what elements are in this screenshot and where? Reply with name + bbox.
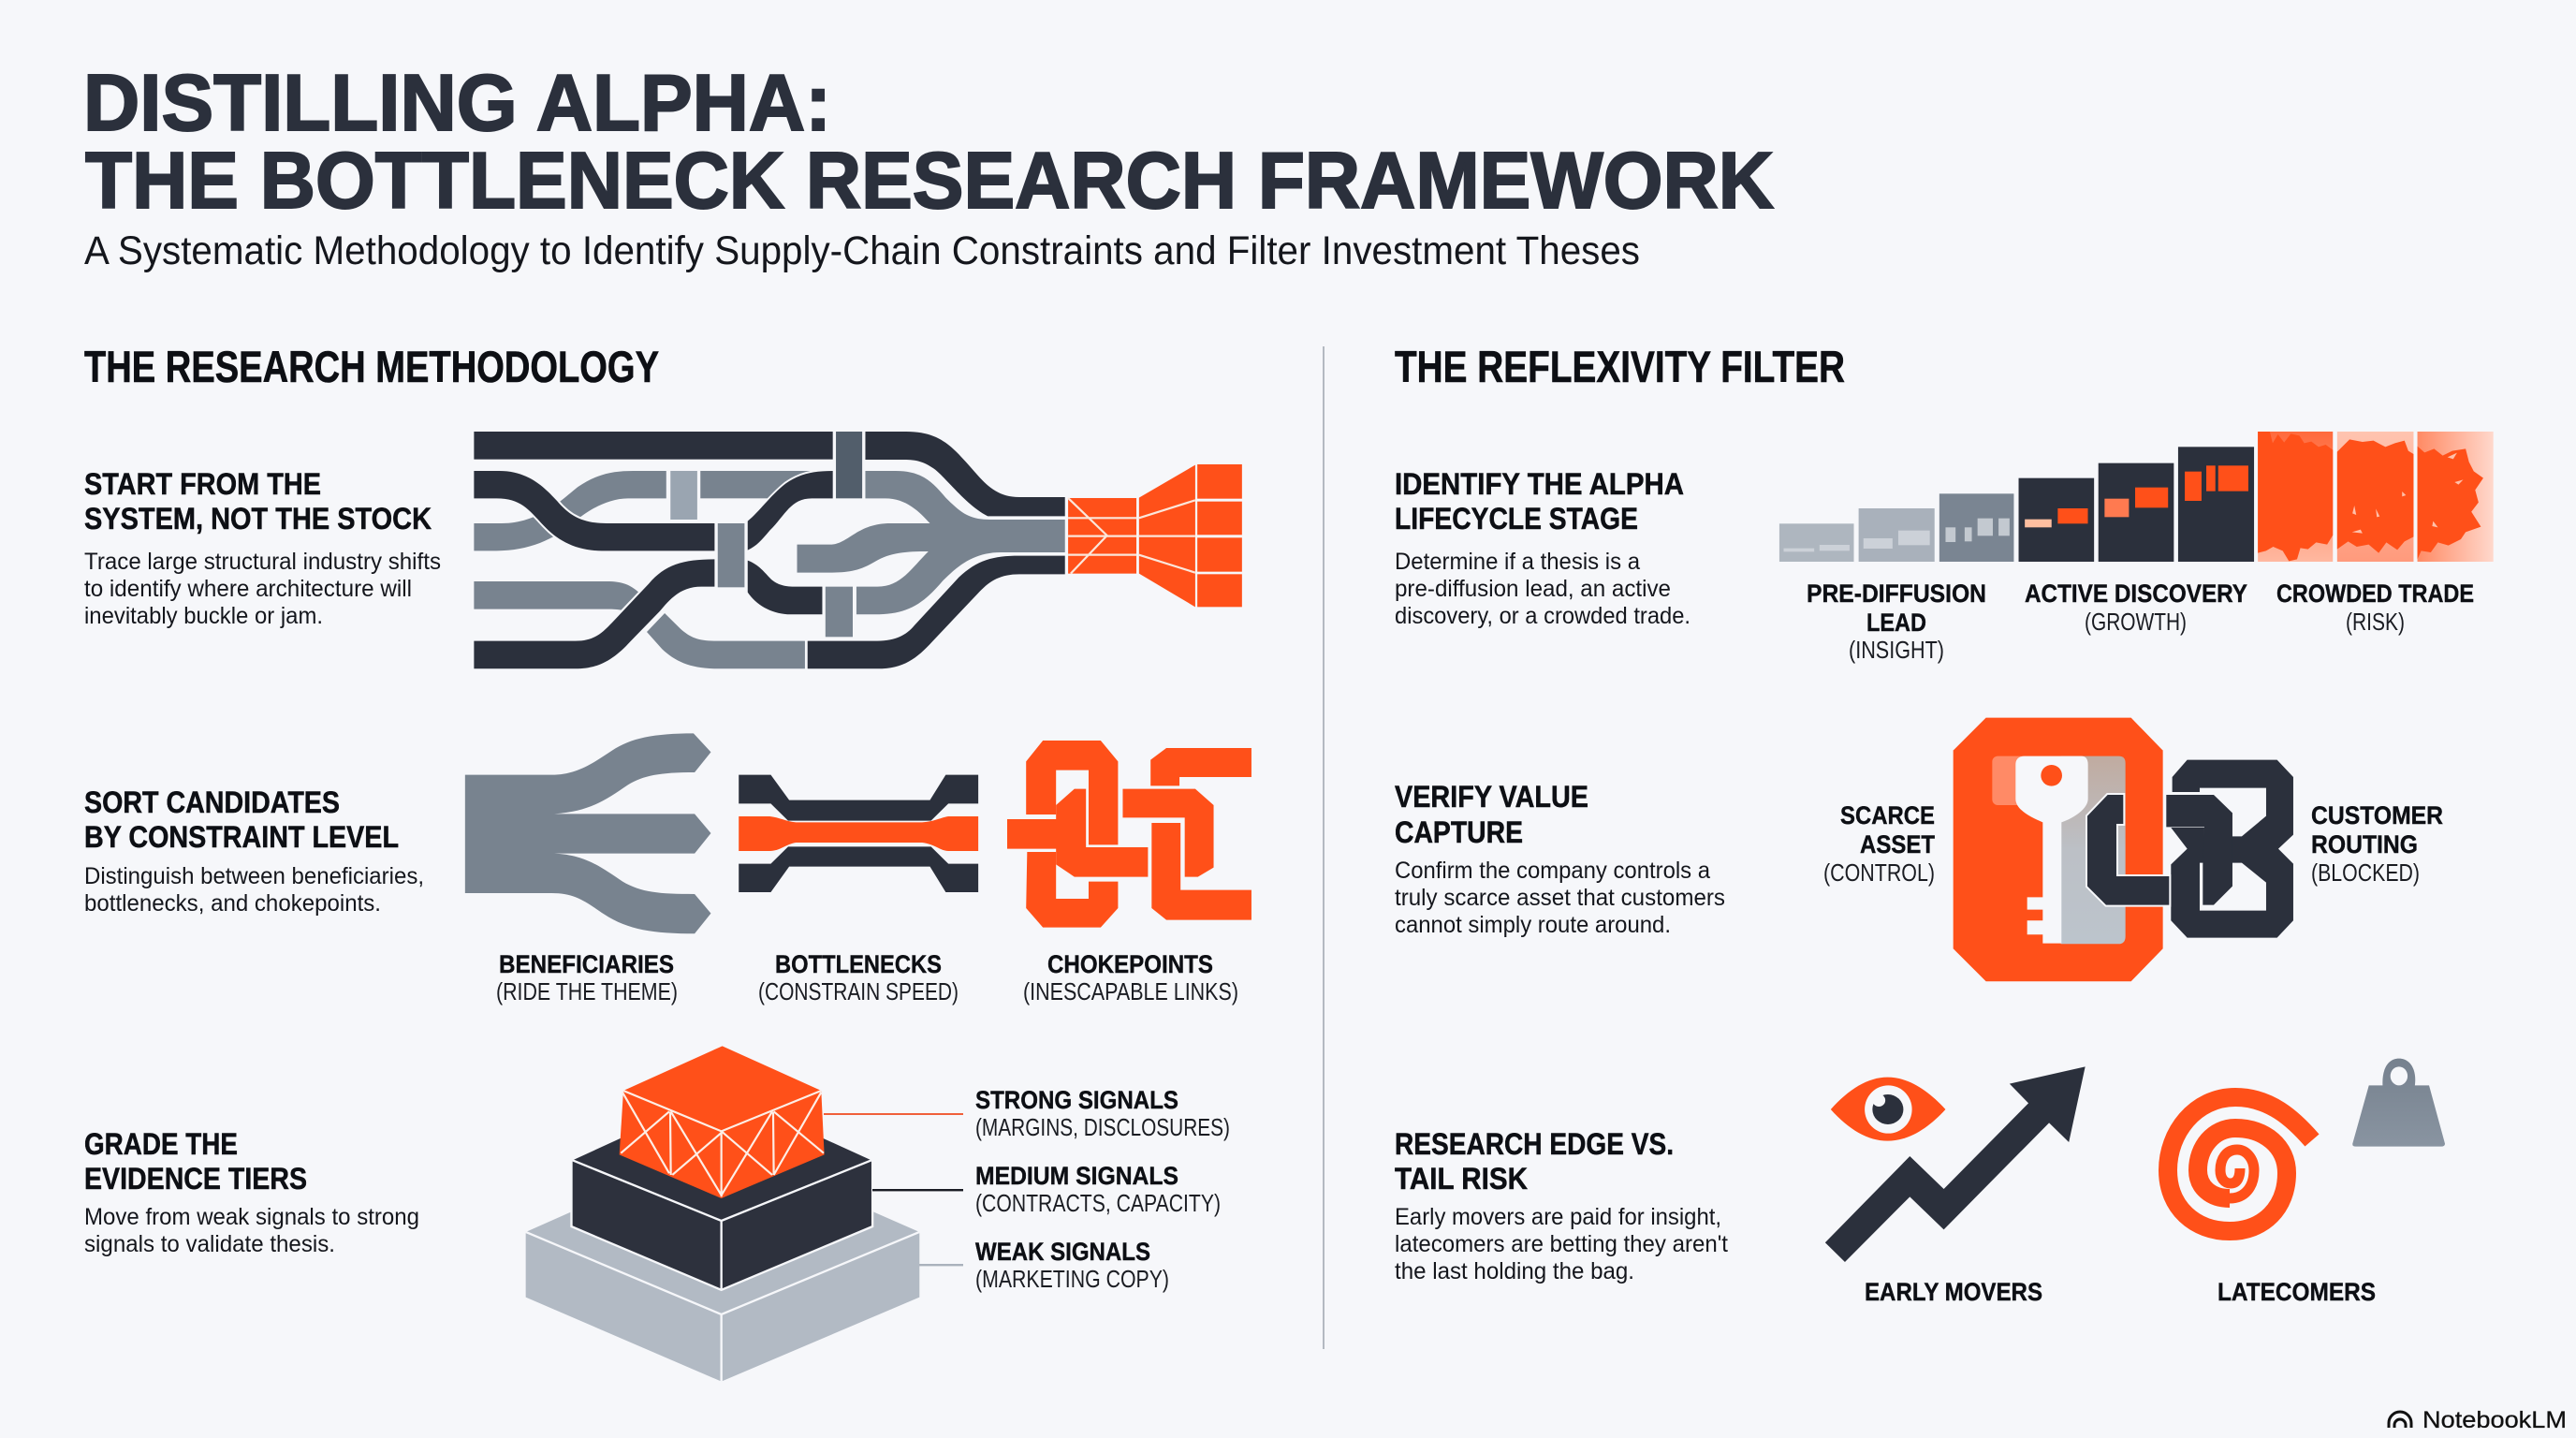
icon: eye (1831, 1078, 1945, 1141)
text block: research edge vs tail risk: TAIL RISK (1395, 1162, 1528, 1196)
text block: research edge vs tail risk: RESEARCH EDGE VS. (1395, 1127, 1674, 1161)
bars: active discovery (2019, 447, 2254, 562)
subtitle: A Systematic Methodology to Identify Supply-Chain Constraints and Filter Investment Theses (84, 228, 1640, 273)
title: THE BOTTLENECK RESEARCH FRAMEWORK (85, 137, 1774, 226)
label: customer routing: CUSTOMER (2311, 801, 2443, 829)
icon: downward spiral (2168, 1097, 2312, 1231)
text block: verify value capture: CAPTURE (1395, 815, 1523, 849)
text block: grade the evidence tiers: Move from weak signals to strong (84, 1204, 419, 1230)
key (2015, 756, 2088, 944)
label: crowded trade: (RISK) (2346, 608, 2405, 636)
icon: hanging weight (2352, 1059, 2445, 1147)
icon: rising arrow (1825, 1066, 2086, 1262)
panel: the reflexivity filter (1395, 342, 2494, 1306)
text block: verify value capture (1395, 780, 1725, 938)
label: beneficiaries: BENEFICIARIES (499, 950, 674, 978)
label: medium signals: (CONTRACTS, CAPACITY) (975, 1189, 1221, 1217)
label: customer routing: ROUTING (2311, 830, 2418, 858)
text block: start from the system: Trace large structural industry shifts (84, 549, 441, 575)
label: medium signals (975, 1162, 1221, 1217)
bars: crowded trade (2258, 432, 2494, 562)
text block: verify value capture: VERIFY VALUE (1395, 780, 1588, 814)
text block: identify the alpha lifecycle stage: Determine if a thesis is a (1395, 549, 1640, 575)
medium tier block (573, 1093, 871, 1289)
label: weak signals: WEAK SIGNALS (975, 1238, 1150, 1266)
icon: bottlenecks narrowing channels (739, 775, 978, 892)
text block: sort candidates: bottlenecks, and chokepoints. (84, 890, 381, 917)
label: active discovery: ACTIVE DISCOVERY (2025, 580, 2247, 608)
text block: sort candidates (84, 785, 424, 917)
text block: start from the system: to identify where architecture will (84, 576, 412, 602)
bars: pre-diffusion (1779, 493, 2013, 562)
text block: sort candidates: SORT CANDIDATES (84, 785, 340, 819)
heading: the reflexivity filter: THE REFLEXIVITY FILTER (1395, 342, 1845, 391)
label: weak signals: (MARKETING COPY) (975, 1265, 1169, 1293)
label: chokepoints: CHOKEPOINTS (1047, 950, 1213, 978)
text block: research edge vs tail risk: latecomers are betting they aren't (1395, 1231, 1728, 1257)
text block: verify value capture: Confirm the company controls a (1395, 858, 1710, 884)
leader line: strong signals (824, 1113, 963, 1115)
text block: research edge vs tail risk (1395, 1127, 1728, 1284)
title (83, 59, 1774, 226)
label: beneficiaries (496, 950, 678, 1005)
label: bottlenecks: (CONSTRAIN SPEED) (758, 977, 959, 1005)
diagram: stacked evidence tiers pyramid (526, 1046, 919, 1382)
dark chain links (2087, 760, 2293, 938)
heading: the research methodology: THE RESEARCH METHODOLOGY (84, 342, 659, 391)
label: medium signals: MEDIUM SIGNALS (975, 1162, 1178, 1190)
label: pre-diffusion lead: LEAD (1866, 609, 1926, 637)
icon: beneficiaries branching flow (465, 733, 710, 933)
icon: orange bottleneck funnel (1068, 464, 1242, 607)
label: active discovery: (GROWTH) (2085, 608, 2187, 636)
label: scarce asset: SCARCE (1840, 801, 1935, 829)
label: strong signals (975, 1086, 1230, 1141)
text block: grade the evidence tiers: EVIDENCE TIERS (84, 1162, 307, 1196)
text block: grade the evidence tiers: GRADE THE (84, 1127, 238, 1161)
text block: identify the alpha lifecycle stage: LIFECYCLE STAGE (1395, 502, 1638, 536)
text block: start from the system: SYSTEM, NOT THE STOCK (84, 502, 432, 536)
text block: research edge vs tail risk: the last holding the bag. (1395, 1258, 1634, 1284)
text block: start from the system: inevitably buckle or jam. (84, 603, 323, 629)
text block: start from the system: START FROM THE (84, 467, 321, 501)
text block: sort candidates: Distinguish between beneficiaries, (84, 863, 424, 889)
text block: identify the alpha lifecycle stage: pre-diffusion lead, an active (1395, 576, 1671, 602)
label: weak signals (975, 1238, 1169, 1293)
text block: sort candidates: BY CONSTRAINT LEVEL (84, 820, 399, 854)
text block: verify value capture: truly scarce asset that customers (1395, 885, 1725, 911)
label: strong signals: STRONG SIGNALS (975, 1086, 1178, 1114)
label: customer routing (2311, 801, 2443, 887)
chart: alpha lifecycle stepped bars (1779, 432, 2494, 562)
leader line: weak signals (919, 1264, 963, 1266)
label: active discovery (2025, 580, 2247, 636)
panel: the research methodology (84, 342, 1251, 1382)
orange vault (1954, 718, 2163, 981)
label: scarce asset (1823, 801, 1935, 887)
text block: start from the system (84, 467, 441, 629)
label: pre-diffusion lead: (INSIGHT) (1849, 636, 1944, 664)
text block: identify the alpha lifecycle stage: discovery, or a crowded trade. (1395, 603, 1690, 629)
label: chokepoints (1023, 950, 1238, 1005)
label: latecomers: LATECOMERS (2217, 1278, 2376, 1306)
icon: key inside orange vault linked to dark chain (1954, 718, 2293, 981)
label: pre-diffusion lead (1807, 580, 1986, 664)
weak tier block (526, 1145, 919, 1382)
label: early movers: EARLY MOVERS (1865, 1278, 2042, 1306)
text block: identify the alpha lifecycle stage: IDENTIFY THE ALPHA (1395, 467, 1684, 501)
title: DISTILLING ALPHA: (83, 59, 831, 148)
text block: verify value capture: cannot simply route around. (1395, 912, 1671, 938)
diagram: tangled supply-chain strands converging on an orange bottleneck (474, 432, 1242, 668)
label: scarce asset: ASSET (1860, 830, 1935, 858)
logo: NotebookLM: NotebookLM (2422, 1407, 2567, 1433)
strong tier block (620, 1046, 825, 1198)
label: bottlenecks (758, 950, 959, 1005)
label: scarce asset: (CONTROL) (1823, 858, 1935, 887)
leader line: medium signals (872, 1189, 963, 1191)
label: strong signals: (MARGINS, DISCLOSURES) (975, 1113, 1230, 1141)
text block: research edge vs tail risk: Early movers are paid for insight, (1395, 1204, 1721, 1230)
label: chokepoints: (INESCAPABLE LINKS) (1023, 977, 1238, 1005)
label: bottlenecks: BOTTLENECKS (775, 950, 942, 978)
icon: chokepoints interlocked chain (1007, 741, 1251, 928)
label: customer routing: (BLOCKED) (2311, 858, 2420, 887)
label: crowded trade: CROWDED TRADE (2276, 580, 2474, 608)
label: pre-diffusion lead: PRE-DIFFUSION (1807, 580, 1986, 608)
text block: identify the alpha lifecycle stage (1395, 467, 1690, 629)
text block: grade the evidence tiers (84, 1127, 419, 1257)
label: crowded trade (2276, 580, 2474, 636)
label: beneficiaries: (RIDE THE THEME) (496, 977, 678, 1005)
text block: grade the evidence tiers: signals to validate thesis. (84, 1231, 335, 1257)
